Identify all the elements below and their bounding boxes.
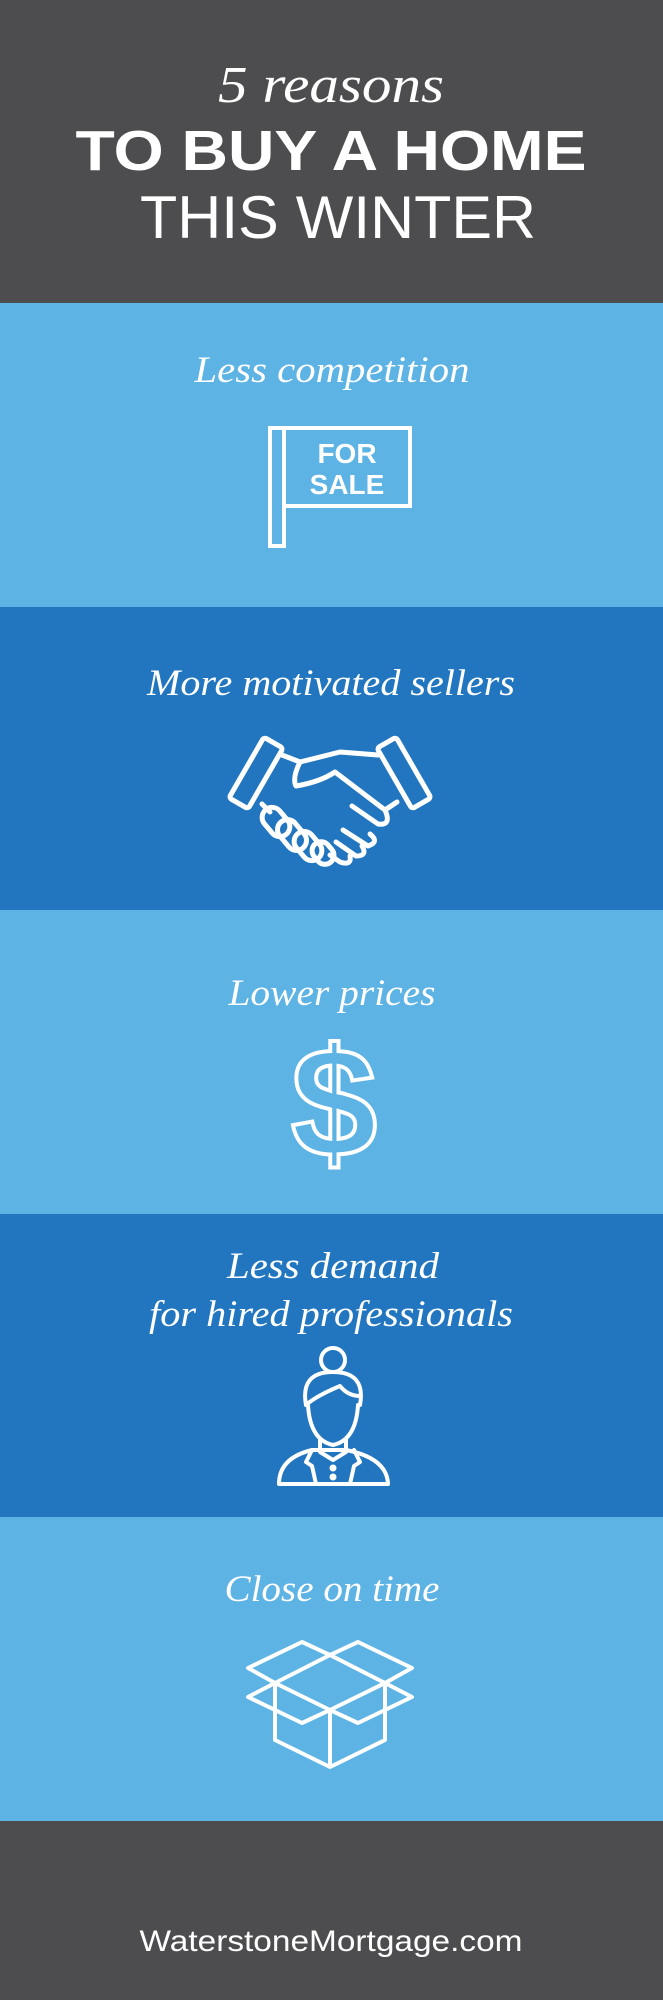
footer: website: WaterstoneMortgage.com: [140, 1925, 522, 1958]
title: this winter: THIS WINTER: [140, 184, 536, 251]
heading: close on time: Close on time: [224, 1569, 440, 1610]
footer: [0, 1821, 663, 2000]
icon: professional woman: [279, 1348, 388, 1484]
panel: more motivated sellers: [0, 607, 663, 910]
panel: lower prices: [0, 910, 663, 1214]
icon: for sale sign: [270, 428, 410, 546]
icon: for sale sign: FOR: [317, 438, 377, 469]
panel: close on time: [0, 1517, 663, 1821]
icon: handshake: [229, 737, 431, 868]
icon: dollar sign: $: [291, 1016, 377, 1189]
heading: less demand for hired professionals: for hired professionals: [149, 1294, 513, 1335]
heading: lower prices: Lower prices: [227, 973, 436, 1014]
header panel: [0, 0, 663, 303]
panel: less demand for hired professionals: [0, 1214, 663, 1517]
heading: less demand for hired professionals: [149, 1246, 513, 1335]
icon: open box: [248, 1642, 412, 1767]
icon: for sale sign: SALE: [310, 469, 384, 500]
panel: less competition: [0, 303, 663, 607]
title: 5 reasons: 5 reasons: [218, 57, 444, 114]
heading: less demand for hired professionals: Less demand: [226, 1246, 440, 1287]
heading: more motivated sellers: More motivated sellers: [146, 663, 515, 704]
heading: less competition: Less competition: [193, 350, 470, 391]
title: to buy a home: TO BUY A HOME: [76, 119, 586, 183]
